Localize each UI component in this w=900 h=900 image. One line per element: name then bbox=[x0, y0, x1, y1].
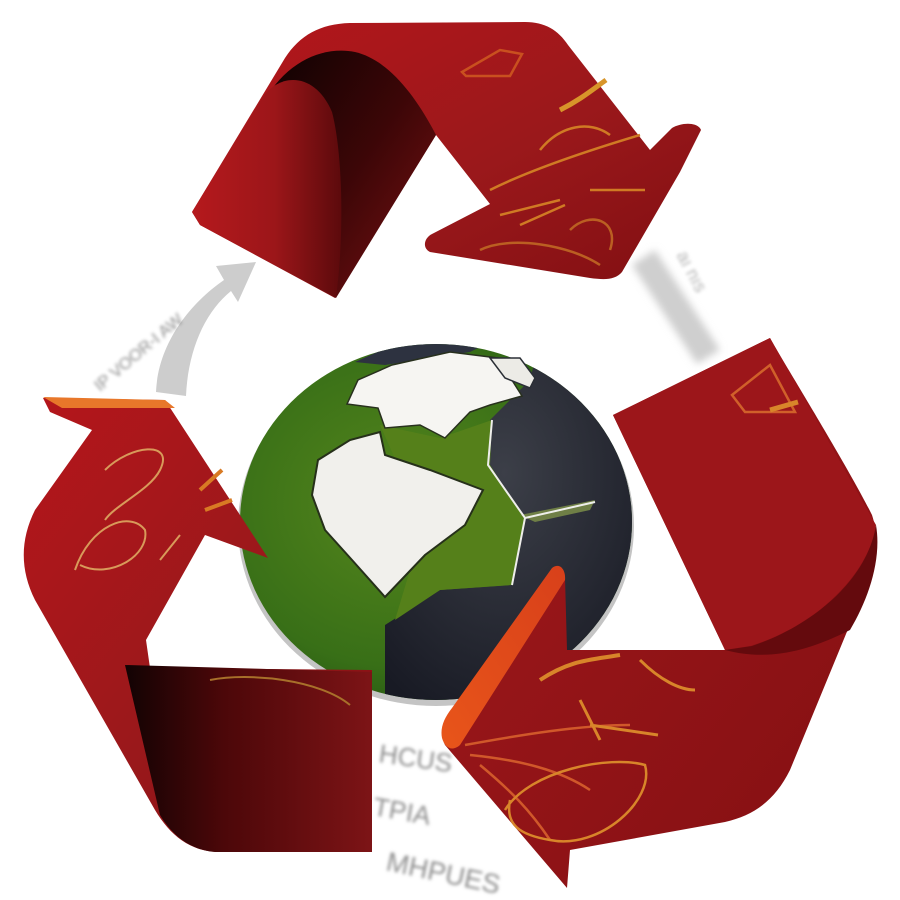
gold script decoration bbox=[462, 50, 645, 265]
recycling arrow: top bbox=[192, 22, 701, 298]
crack coast bbox=[488, 420, 595, 585]
dark lower face bbox=[125, 665, 372, 852]
gold script decoration bbox=[75, 449, 350, 705]
orange arrowhead edge bbox=[441, 566, 565, 749]
grey arrow: upper right bbox=[632, 247, 720, 364]
small white island bbox=[490, 358, 535, 388]
arrow body bbox=[192, 22, 701, 298]
faded label: right: aı nıs bbox=[672, 247, 711, 296]
recycling arrow: right bbox=[441, 338, 877, 888]
recycling arrow: left bbox=[24, 397, 372, 852]
dark ocean top bbox=[355, 344, 478, 365]
faded label: bottom: HCUS bbox=[377, 738, 454, 778]
faded label: bottom bbox=[371, 738, 503, 900]
gold script decoration bbox=[465, 365, 798, 841]
orange top edge bbox=[43, 397, 175, 408]
upper face bbox=[613, 338, 876, 650]
highlights on land bbox=[520, 500, 595, 522]
grey arrow: upper left bbox=[90, 262, 256, 396]
faded label: left: IP VOOR-I AW bbox=[90, 310, 187, 395]
inner fold shadow bbox=[268, 51, 436, 298]
globe shadow rim bbox=[238, 346, 634, 706]
green land centre bbox=[380, 420, 525, 620]
faded label: bottom: MHPUES bbox=[384, 847, 503, 900]
arrow body bbox=[442, 338, 876, 888]
dark bend bbox=[725, 525, 877, 655]
globe bbox=[238, 340, 650, 720]
dark ocean right bbox=[385, 368, 632, 700]
white continent lower bbox=[312, 432, 483, 597]
globe sphere bbox=[240, 344, 632, 700]
faded label: bottom: TPIA bbox=[371, 791, 434, 831]
white continent upper bbox=[347, 352, 522, 438]
arrow body bbox=[24, 398, 372, 852]
front face bbox=[192, 80, 341, 298]
